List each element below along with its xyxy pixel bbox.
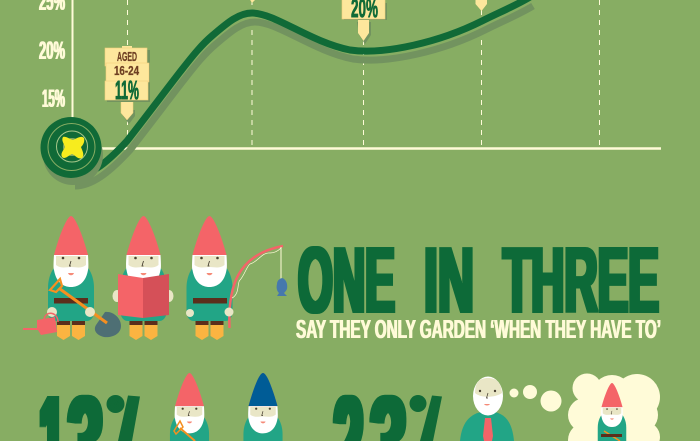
tie xyxy=(483,418,493,441)
man thinking of a gnome xyxy=(460,376,514,441)
hose reel xyxy=(40,117,103,185)
gnome with spade, red hat xyxy=(170,373,209,441)
thought cloud with gnome xyxy=(568,374,660,441)
y axis labels xyxy=(39,0,65,113)
y axis labels: 20% xyxy=(39,37,65,65)
chart: gardening by age: 15% xyxy=(42,85,65,113)
belt xyxy=(54,298,88,304)
signpost: 252 pin xyxy=(249,0,255,3)
signpost: first pin: 11% xyxy=(115,75,139,105)
gnome blue hat xyxy=(243,373,283,441)
curve line xyxy=(72,0,530,177)
belt xyxy=(193,298,227,304)
stat: 23% xyxy=(332,394,442,441)
man body xyxy=(460,411,514,441)
signpost: first pin: 16-24 xyxy=(114,63,140,78)
stat: 13%: % xyxy=(108,394,123,416)
signpost: first pin xyxy=(105,46,150,124)
axes xyxy=(72,0,661,148)
fishing rod xyxy=(229,246,283,328)
fish xyxy=(277,278,287,296)
open book xyxy=(118,274,143,318)
stat: 13% xyxy=(40,394,140,441)
curve shadow xyxy=(75,6,533,186)
chart: gardening by age xyxy=(39,0,661,186)
stat: 23%: % xyxy=(411,394,425,415)
icon: yellow nozzle xyxy=(61,137,84,158)
heading: one in three xyxy=(298,228,659,332)
spade xyxy=(95,312,121,337)
watering can xyxy=(23,317,57,335)
signpost: third pin xyxy=(476,0,487,11)
gnome with spade and watering can xyxy=(23,216,121,340)
thought bubbles xyxy=(510,385,562,412)
heading: one in three: IN xyxy=(424,228,474,332)
gnome trio xyxy=(23,216,287,340)
signpost: first pin: AGED xyxy=(117,49,137,64)
signpost: second pin xyxy=(342,0,387,44)
gnome reading book xyxy=(112,216,174,340)
gnome fishing xyxy=(186,216,287,340)
heading: one in three: ONE xyxy=(298,228,395,332)
man head xyxy=(473,376,503,416)
